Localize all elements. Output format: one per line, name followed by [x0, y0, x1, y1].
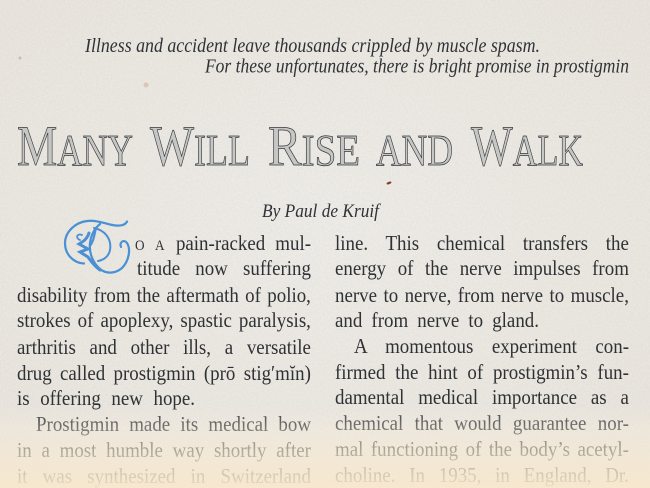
text column: right: firmed the hint of prostigmin’s fun-: [335, 360, 629, 384]
icon: ornate blue drop cap T: [64, 220, 130, 274]
text column: left: [17, 231, 311, 488]
text column: right: [335, 230, 629, 486]
text column: right: line. This chemical transfers the: [335, 230, 629, 254]
text column: left: drug called prostigmin (prō stig′mĭn): [17, 360, 311, 384]
text column: left: titude now suffering: [137, 256, 311, 280]
subtitle: Illness and accident leave thousands crippled by muscle spasm.: [84, 36, 540, 57]
text column: right: chemical that would guarantee nor-: [335, 410, 629, 434]
text column: left: Prostigmin made its medical bow: [36, 412, 311, 436]
text column: left: O A pain-racked mul-: [135, 231, 311, 255]
text column: left: it was synthesized in Switzerland: [17, 464, 311, 488]
title: [17, 120, 583, 175]
subtitle: [84, 36, 629, 78]
bottom fade overlay: [0, 405, 650, 488]
text column: left: in a most humble way shortly after: [17, 438, 311, 462]
byline: By Paul de Kruif: [262, 201, 381, 222]
text column: right: energy of the nerve impulses from: [335, 256, 629, 280]
text column: right: mal functioning of the body’s acetyl-: [335, 436, 629, 460]
text column: right: A momentous experiment con-: [354, 334, 629, 358]
text column: right: damental medical importance as a: [335, 384, 629, 408]
text column: right: nerve to nerve, from nerve to muscle,: [335, 282, 629, 306]
text column: left: arthritis and other ills, a versatile: [17, 334, 311, 358]
text column: right: choline. In 1935, in England, Dr.: [335, 462, 629, 486]
text column: left: disability from the aftermath of polio,: [17, 282, 311, 306]
text column: right: and from nerve to gland.: [335, 308, 539, 332]
text column: left: is offering new hope.: [17, 386, 195, 410]
text column: left: strokes of apoplexy, spastic paralysis,: [17, 308, 311, 332]
title: AND: [376, 126, 453, 175]
